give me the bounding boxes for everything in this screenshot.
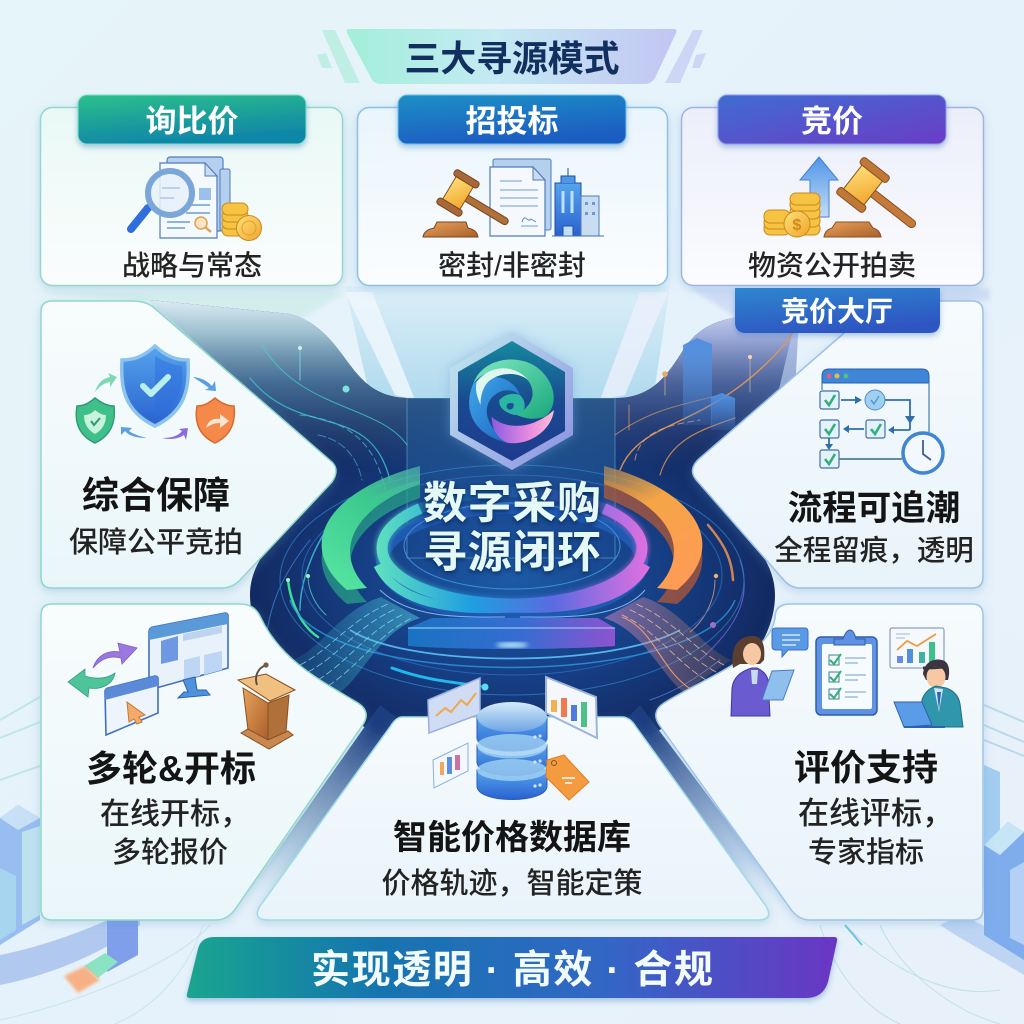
- description: 全程留痕，透明: [774, 535, 974, 567]
- icon: online bidding screens and podium: [68, 613, 295, 749]
- description line 2: 专家指标: [808, 836, 924, 869]
- towers in hub: [683, 338, 735, 430]
- icon: price database: [428, 677, 597, 800]
- panel: 智能价格数据库: [257, 677, 769, 920]
- caption: 战略与常态: [122, 250, 262, 281]
- tab: 竞价大厅: [735, 288, 940, 333]
- decorative city bottom right: [820, 705, 1024, 1024]
- icon: process flow window and clock: [820, 369, 943, 473]
- tab: 竞价: [718, 95, 946, 144]
- panel: 多轮&开标: [41, 604, 366, 920]
- hub title: 寻源闭环: [423, 528, 601, 577]
- title banner: [317, 29, 706, 84]
- heading: 流程可追潮: [788, 490, 960, 528]
- heading: 评价支持: [794, 747, 938, 788]
- outer closed-loop ring: [322, 466, 702, 604]
- tab: 招投标: [398, 95, 626, 144]
- heading: 多轮&开标: [86, 748, 256, 789]
- concentric orbit lines: [280, 465, 744, 695]
- title text: 三大寻源模式: [404, 38, 620, 79]
- panel: 综合保障: [41, 301, 336, 588]
- description line 1: 在线开标，: [100, 798, 250, 831]
- panel: 流程可追潮: [692, 288, 983, 588]
- circuit band left: [293, 597, 420, 692]
- heading: 智能价格数据库: [393, 819, 631, 857]
- description: 保障公平竞拍: [69, 526, 243, 559]
- tab: 竞价: 竞价: [801, 104, 863, 139]
- description line 1: 在线评标，: [798, 796, 953, 831]
- hexagon logo: [450, 332, 573, 470]
- orange arc: [604, 466, 702, 604]
- footer banner: [187, 937, 837, 998]
- panel: 竞价: [682, 95, 984, 286]
- description: 价格轨迹，智能定策: [381, 867, 643, 900]
- icon: rising arrow, coins, gavel: [764, 156, 929, 244]
- footer text: 实现透明 · 高效 · 合规: [311, 949, 713, 992]
- circuit band right: [604, 597, 731, 692]
- icon: gavel, contract, buildings: [423, 159, 604, 240]
- tab: 竞价大厅: 竞价大厅: [781, 296, 893, 327]
- tab: 招投标: 招投标: [466, 104, 558, 139]
- data stream lines right: [615, 320, 800, 700]
- inner ring: [378, 492, 646, 617]
- heading: 综合保障: [82, 475, 230, 516]
- glass column: [407, 398, 615, 558]
- dark central hub: [150, 300, 805, 925]
- green arc: [322, 466, 420, 604]
- decorative city bottom left: [0, 697, 210, 1024]
- panel: 评价支持: [656, 604, 983, 920]
- panel: 询比价: [40, 95, 342, 286]
- swirl mark: [469, 359, 554, 443]
- caption: 物资公开拍卖: [748, 250, 916, 281]
- icon: shields: [76, 346, 234, 443]
- panel: 招投标: [358, 95, 668, 286]
- icon: magnifier, documents and coins: [131, 157, 262, 240]
- tab: 询比价: 询比价: [146, 104, 238, 139]
- icon: evaluators with checklist: [731, 628, 963, 727]
- base slab: [350, 618, 680, 658]
- description line 2: 多轮报价: [112, 836, 228, 869]
- caption: 密封/非密封: [438, 250, 586, 281]
- icon: rising arrow, coins, gavel: $: [793, 217, 802, 234]
- data stream lines left: [250, 345, 488, 690]
- dark gutters between lower panels: [225, 705, 396, 925]
- tab: 询比价: [78, 95, 306, 144]
- hub title: 数字采购: [423, 479, 601, 528]
- light beam from cards into hub: [30, 286, 990, 420]
- hub title: [423, 479, 601, 577]
